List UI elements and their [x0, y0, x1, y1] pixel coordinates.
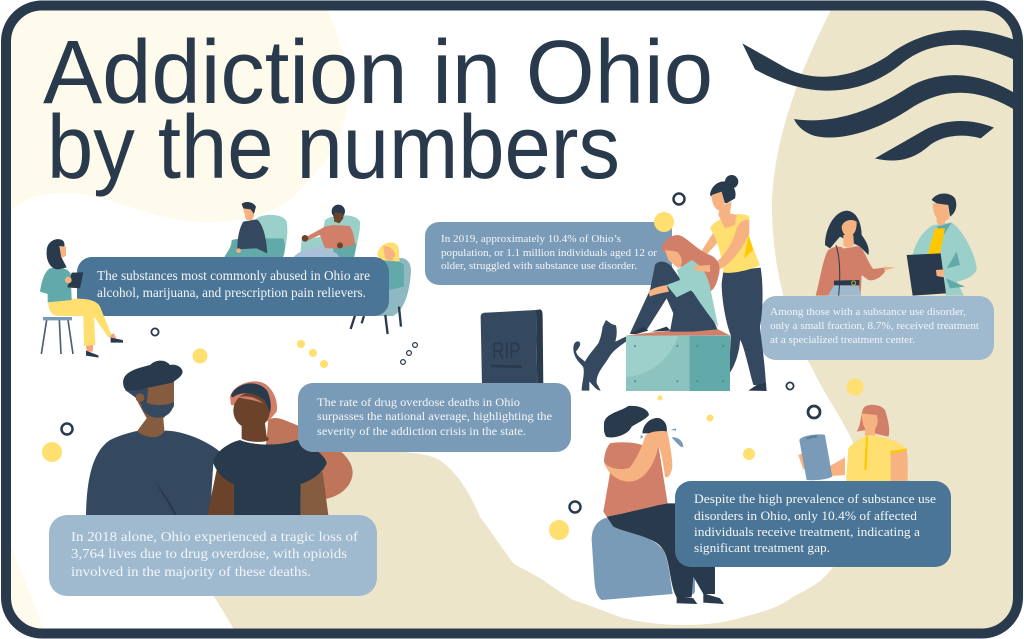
callout: commonly abused substances: The substances most commonly abused in Ohio are [97, 268, 370, 283]
patient in salmon shirt [293, 205, 360, 258]
crying woman [592, 406, 724, 604]
callout: 2018 deaths: In 2018 alone, Ohio experienced a tragic loss of [71, 530, 358, 545]
standing woman [694, 175, 767, 391]
callout: 2018 deaths [49, 515, 377, 596]
callout: 2019 prevalence: In 2019, approximately 10.4% of Ohio’s [441, 234, 621, 245]
callout: 2018 deaths: 3,764 lives due to drug overdose, with opioids [71, 547, 347, 562]
callout: treatment gap: disorders in Ohio, only 10.4% of affected [694, 508, 918, 523]
box seat [626, 329, 730, 391]
callout: 2019 prevalence: population, or 1.1 million individuals aged 12 or [441, 248, 657, 259]
couple illustration [86, 361, 353, 515]
callout: treatment fraction: Among those with a substance use disorder, [770, 307, 966, 318]
callout: commonly abused substances: alcohol, marijuana, and prescription pain relievers. [97, 285, 366, 300]
title [43, 23, 713, 198]
title: Addiction in Ohio [43, 23, 713, 123]
callout: commonly abused substances [77, 257, 389, 316]
callout: rate of overdose deaths: The rate of drug overdose deaths in Ohio [317, 395, 520, 409]
callout: rate of overdose deaths: severity of the addiction crisis in the state. [317, 424, 526, 438]
callout: treatment fraction [761, 296, 994, 360]
callout: 2018 deaths: involved in the majority of these deaths. [71, 565, 311, 580]
decorative waves icon [742, 30, 1015, 160]
callout: 2019 prevalence: older, struggled with substance use disorder. [441, 261, 637, 272]
sitting girl [629, 235, 720, 334]
RIP gravestone icon: RIP [492, 338, 521, 364]
man with clipboard [907, 194, 977, 296]
callout: treatment gap: Despite the high prevalence of substance use [694, 491, 936, 506]
title: by the numbers [47, 98, 620, 198]
consultation pair illustration [816, 194, 977, 296]
comforting women and cat illustration [573, 175, 767, 391]
patient in navy sweater [224, 202, 287, 258]
yellow dot over box [654, 212, 674, 232]
callout: 2019 prevalence [425, 222, 672, 285]
patient with blonde hair [351, 243, 411, 334]
nurse with clipboard [798, 405, 908, 482]
callout: treatment gap: individuals receive treatment, indicating a [694, 524, 920, 539]
scattered dots and rings [42, 194, 864, 540]
RIP gravestone icon [481, 309, 543, 385]
man [86, 361, 220, 515]
crying woman and nurse illustration [592, 405, 908, 604]
callout: rate of overdose deaths [298, 383, 571, 452]
woman in salmon sweater [816, 211, 895, 296]
cat [573, 320, 626, 391]
woman [207, 381, 328, 515]
callout: treatment gap: significant treatment gap. [694, 540, 830, 555]
group therapy seated people [224, 202, 411, 334]
callout: treatment fraction: at a specialized treatment center. [770, 335, 915, 346]
callout: rate of overdose deaths: surpasses the national average, highlighting the [317, 409, 552, 423]
woman's long hair [263, 418, 353, 499]
callout: treatment gap [675, 481, 951, 567]
therapist on stool [40, 239, 123, 358]
callout: treatment fraction: only a small fraction, 8.7%, received treatment [770, 321, 979, 332]
